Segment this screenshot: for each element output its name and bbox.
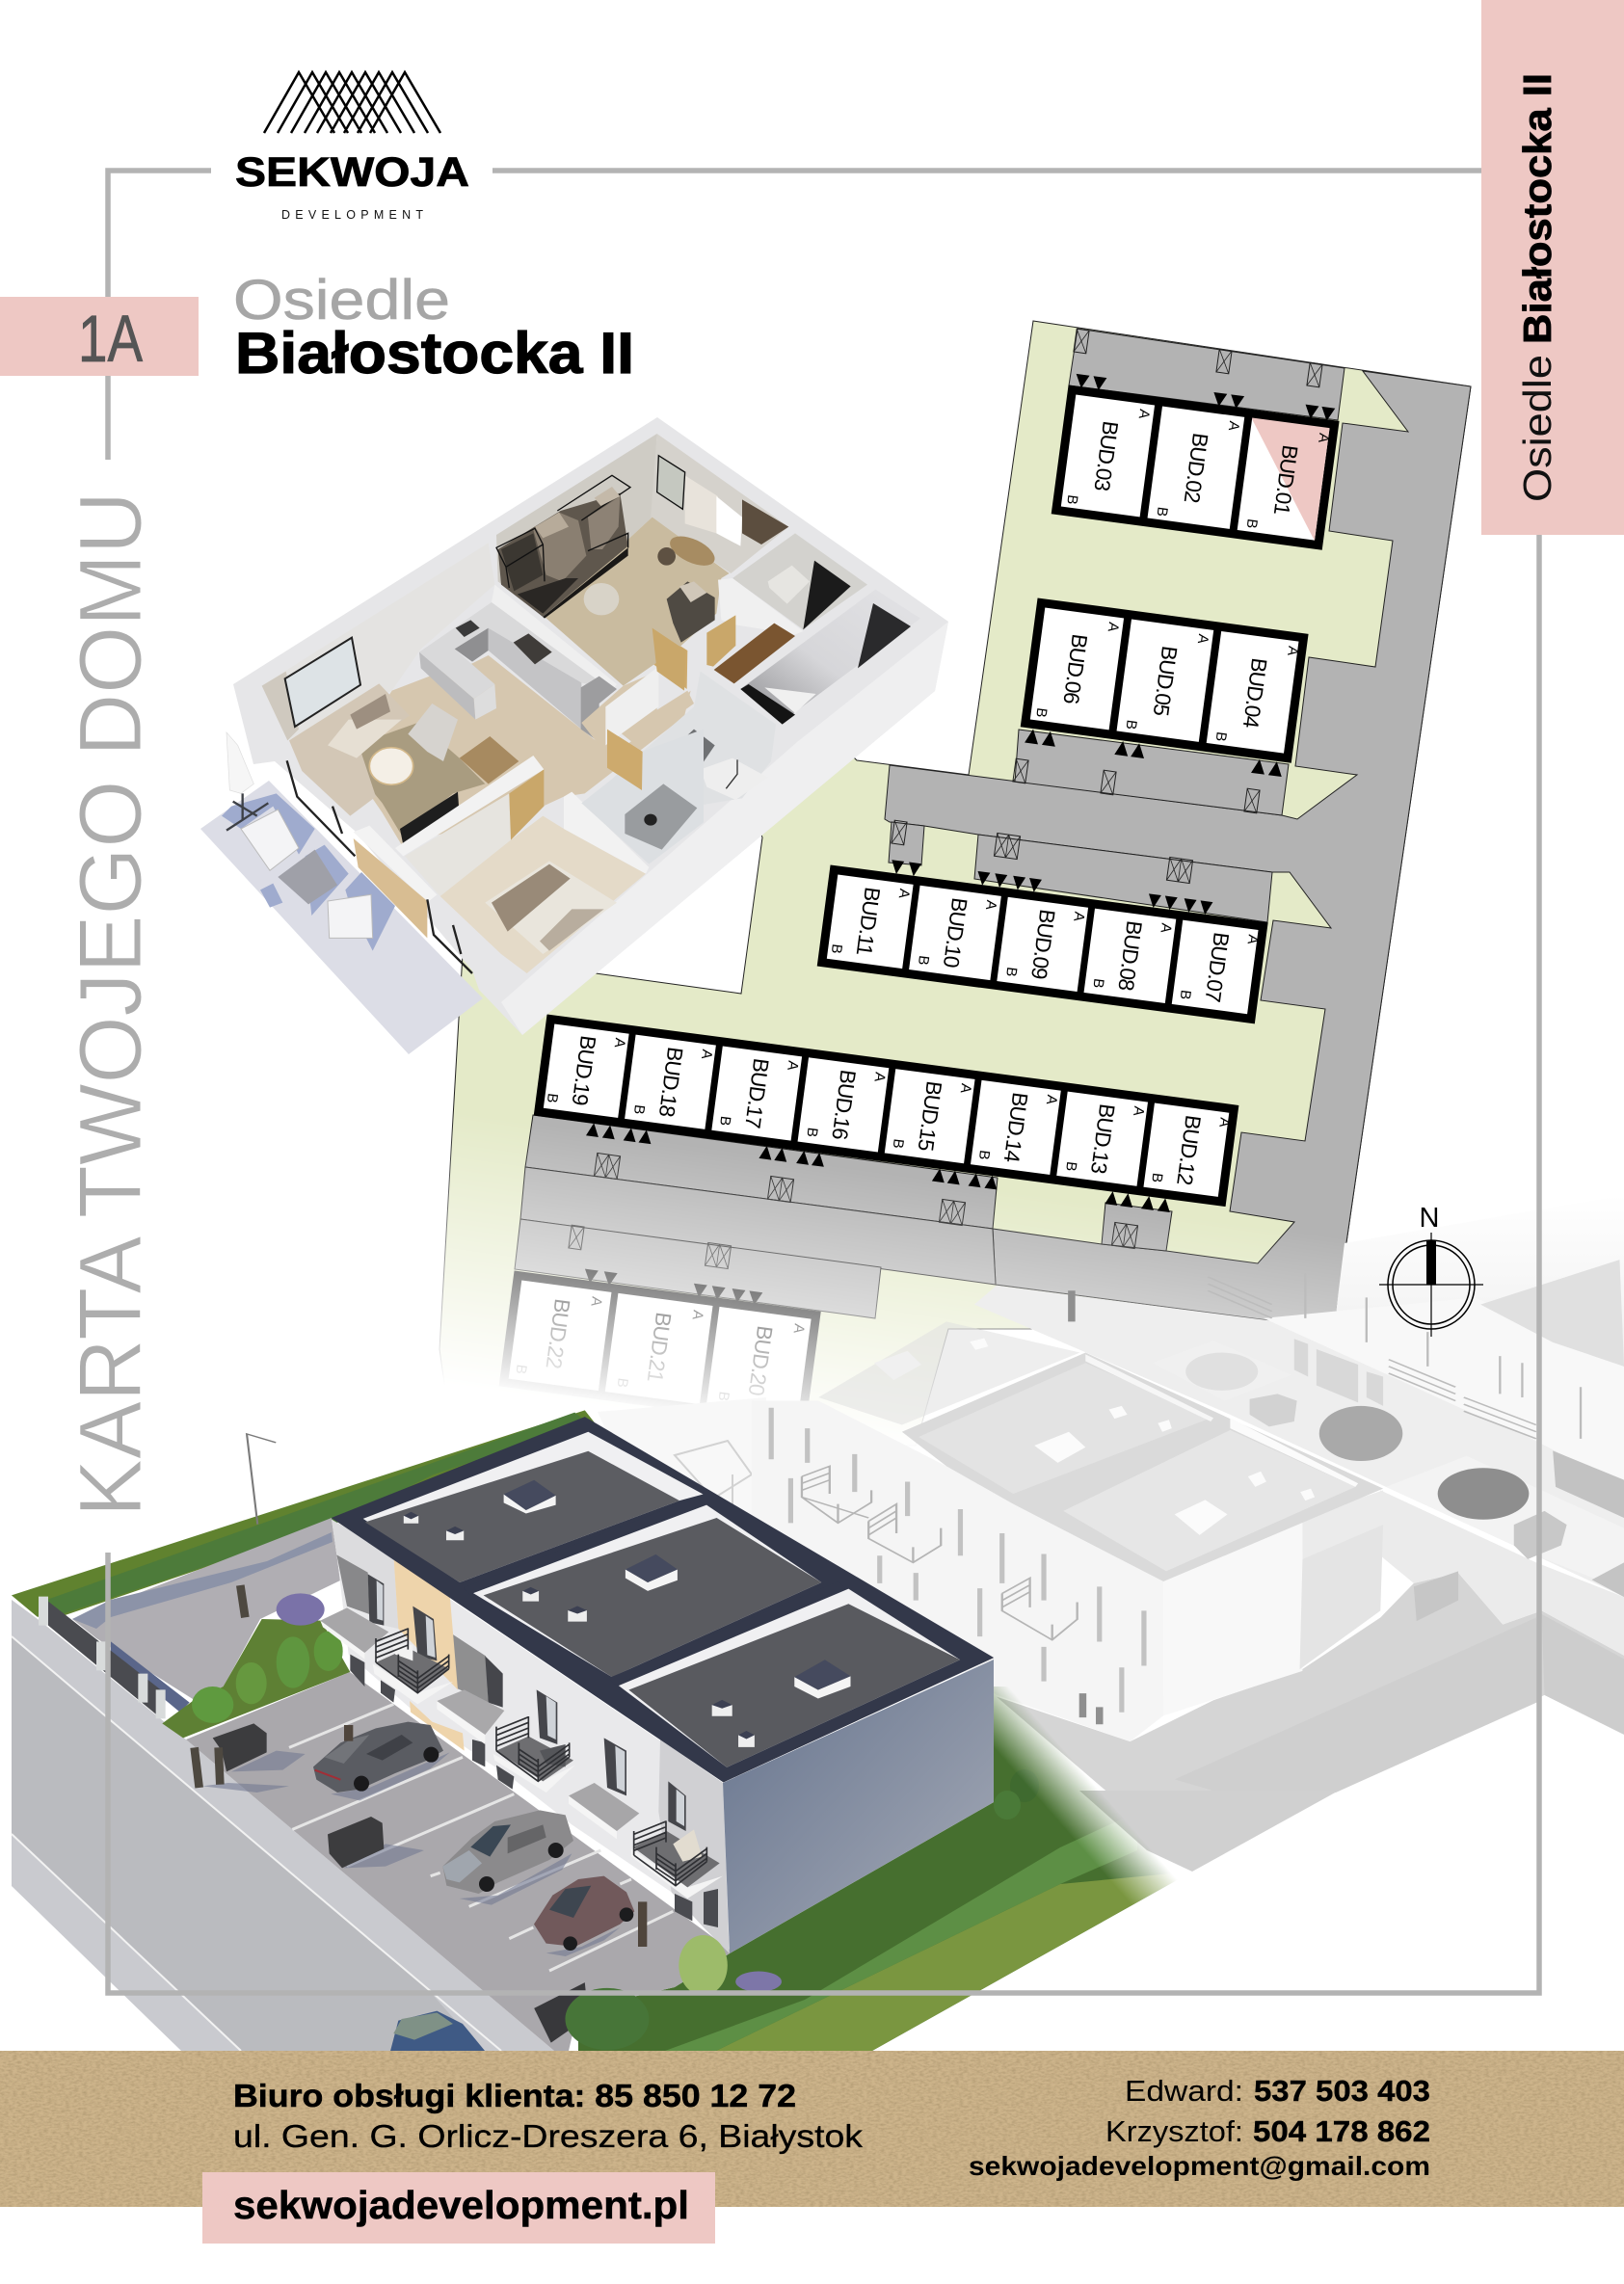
render: windows — [368, 1574, 686, 1831]
aerial render of the building — [12, 1410, 1253, 2051]
plan: faded row BUD.20-22: B — [513, 1364, 530, 1375]
plan: row BUD.07-11: A — [1244, 934, 1262, 945]
ghost: facade balconies — [802, 1466, 1078, 1640]
contact: phones and email: Krzysztof: — [1105, 2114, 1243, 2148]
ghost: cars and bins — [1185, 1353, 1258, 1391]
apartment: sofa — [289, 683, 410, 816]
plan: faded row BUD.20-22 — [499, 1268, 821, 1406]
plan: green site area — [439, 321, 1471, 1446]
frame lines — [108, 171, 1539, 1993]
apartment: dressing room walls — [496, 434, 657, 617]
plan: row BUD.12-19: B — [975, 1149, 993, 1160]
render: parking lines — [289, 1704, 673, 1971]
contact: office — [233, 2078, 864, 2154]
render: facade — [332, 1520, 730, 1953]
apartment: terrace furniture — [241, 810, 299, 870]
plan: row BUD.12-19: BUD.17 — [740, 1057, 773, 1129]
apartment: hall floor — [581, 672, 694, 745]
ghost: far row facade — [1264, 1297, 1624, 1487]
plan: row BUD.01-03: BUD.03 — [1089, 419, 1123, 492]
ghost: left facade extension — [598, 1397, 766, 1658]
plan: faded row BUD.20-22: BUD.22 — [542, 1297, 574, 1370]
ghost: faint area around the compass — [1334, 1195, 1624, 1397]
apartment: wardrobe racks — [498, 493, 628, 617]
render: grass verge — [12, 1410, 595, 1619]
apartment: wooden doors — [652, 628, 686, 691]
plan: row BUD.12-19: A — [1215, 1117, 1234, 1129]
apartment: wood floor — [347, 655, 691, 845]
apartment: desk and stool — [666, 530, 719, 571]
plan: row BUD.01-03: BUD.01 — [1269, 443, 1302, 517]
plan: row BUD.07-11: B — [828, 943, 845, 955]
plan: row BUD.12-19: BUD.14 — [999, 1091, 1032, 1163]
render: roof — [247, 1417, 994, 2050]
plan: row BUD.04-06 — [1023, 602, 1304, 778]
apartment: picture — [285, 638, 360, 727]
render: skylights — [504, 1480, 850, 1698]
apartment: living wall — [262, 543, 494, 740]
plan: row BUD.12-19: A — [784, 1060, 801, 1072]
render: courtyard paving — [72, 1518, 340, 1699]
ghost: gable wall — [1163, 1518, 1302, 1715]
ghost: facade windows — [771, 1408, 1144, 1713]
contact: phones and email: 537 503 403 — [1254, 2074, 1430, 2108]
apartment: dining table — [460, 736, 519, 783]
plan: row BUD.07-11: B — [915, 954, 932, 966]
apartment: staircase room — [740, 590, 920, 723]
plan: faded row BUD.20-22: B — [614, 1377, 631, 1389]
ghost: lower ground — [997, 1573, 1624, 1793]
apartment: coffee table — [369, 748, 413, 784]
apartment: tv unit — [400, 792, 459, 845]
vertical title: KARTA TWOJEGO DOMU — [62, 491, 160, 1517]
heading: Białostocka II — [235, 321, 634, 385]
plan: row BUD.04-06: B — [1122, 719, 1140, 730]
plan: row BUD.04-06: B — [1212, 730, 1230, 742]
plan: row BUD.12-19: B — [716, 1115, 733, 1127]
website box — [202, 2172, 715, 2244]
render: people at cars — [349, 1725, 643, 1947]
render: lawn fading to grey — [578, 1686, 1176, 2051]
render: balcony canopies — [320, 1621, 364, 1660]
plan: utility boxes — [569, 329, 1322, 1269]
apartment: outer shell — [233, 417, 948, 1035]
render: balcony railings — [376, 1628, 720, 1887]
plan: row BUD.01-03: BUD.02 — [1180, 432, 1212, 504]
plan: row BUD.04-06: BUD.05 — [1149, 645, 1182, 717]
render: side wall — [723, 1660, 994, 1953]
plan: row BUD.01-03 — [1056, 374, 1337, 545]
ghost: road and parking — [1386, 1456, 1624, 1590]
plan: row BUD.07-11: BUD.07 — [1201, 931, 1234, 1003]
ghost: skylights — [874, 1339, 1315, 1535]
plan: faded row BUD.20-22: BUD.21 — [643, 1311, 676, 1384]
plan: row BUD.12-19: A — [1043, 1094, 1060, 1105]
ghost: light ground and driveway — [974, 1286, 1624, 1597]
plan: row BUD.12-19: B — [890, 1138, 907, 1150]
ghost: lower ground continuation — [1079, 1791, 1339, 1872]
apartment: window frames — [287, 760, 472, 973]
compass — [1379, 1203, 1483, 1337]
logo: tagline: DEVELOPMENT — [281, 208, 423, 222]
apartment: bedroom-bathroom wall — [564, 792, 649, 874]
plan: row BUD.07-11: B — [1002, 966, 1020, 977]
plan: row BUD.12-19: A — [698, 1049, 715, 1060]
plan: faded row BUD.20-22: A — [790, 1322, 808, 1335]
plan: row BUD.12-19: BUD.16 — [827, 1069, 861, 1141]
plan: row BUD.12-19: BUD.12 — [1172, 1114, 1206, 1186]
apartment: armchair — [408, 704, 458, 761]
site plan — [439, 321, 1471, 1446]
plan: row BUD.04-06: BUD.06 — [1058, 632, 1092, 705]
ghost: faint roof over plan — [818, 1321, 1080, 1425]
plan: row BUD.07-11: B — [1089, 977, 1106, 989]
plan: row BUD.12-19: BUD.13 — [1086, 1102, 1119, 1175]
apartment: terrace — [200, 781, 483, 1054]
plan: row BUD.12-19: A — [611, 1037, 628, 1049]
apartment: corridor wall and stair landing — [718, 578, 803, 634]
plan: row BUD.04-06: BUD.04 — [1238, 656, 1271, 730]
apartment: dressing room floor — [545, 518, 730, 686]
tab: estate name — [1481, 0, 1624, 535]
apartment: wood-clad wall — [354, 826, 437, 903]
compass: N — [1420, 1203, 1439, 1234]
render: balcony slabs — [373, 1664, 453, 1704]
render: lamp post — [247, 1434, 276, 1525]
apartment: inner wall — [605, 667, 658, 745]
apartment: closet — [732, 533, 867, 629]
render: shadows on paving — [331, 1752, 620, 1956]
plan: row BUD.12-19: B — [803, 1127, 821, 1138]
plan: row BUD.07-11: A — [1157, 922, 1175, 934]
apartment: bedroom wall — [405, 793, 511, 896]
render: people and courtyard mailbox — [195, 1585, 306, 1793]
apartment 3D floor plan — [200, 417, 948, 1054]
render: passing car — [390, 2011, 485, 2051]
plan: row BUD.01-03: A — [1225, 420, 1242, 432]
apartment: bed — [485, 861, 617, 954]
faded neighbouring buildings — [752, 1260, 1624, 1793]
plan: faded row BUD.20-22: A — [689, 1309, 706, 1321]
ghost: roof — [902, 1353, 1383, 1581]
plan: row BUD.12-19: A — [957, 1082, 974, 1094]
render: ochre cladding — [393, 1554, 458, 1689]
render: doors — [350, 1655, 718, 1927]
plan: row BUD.12-19: B — [1062, 1160, 1079, 1172]
plan: faded row BUD.20-22: BUD.20 — [744, 1324, 777, 1397]
plan: row BUD.07-11: A — [895, 888, 913, 899]
render: car silver — [442, 1810, 573, 1894]
plan: row BUD.07-11: BUD.11 — [852, 886, 885, 957]
plan: row BUD.01-03: B — [1243, 518, 1261, 529]
plan: row BUD.01-03: B — [1063, 493, 1080, 506]
tab: estate name: Białostocka II — [1515, 73, 1559, 344]
ghost: far row windows and balconies — [1208, 1273, 1581, 1439]
render: fence and garden — [43, 1593, 350, 1738]
ghost: main front facade — [752, 1401, 1163, 1741]
plan: row BUD.07-11: A — [982, 899, 999, 911]
apartment: kitchen counter — [492, 585, 617, 691]
plan: row BUD.12-19: A — [1130, 1105, 1147, 1117]
plan: row BUD.12-19: B — [544, 1092, 561, 1103]
apartment: left rooms — [222, 543, 691, 973]
heading: Osiedle — [233, 269, 450, 332]
apartment: terrace shadows — [222, 793, 395, 951]
render: roof vents — [404, 1516, 755, 1747]
plan: row BUD.12-19: B — [630, 1103, 648, 1115]
plan: row BUD.07-11: BUD.10 — [939, 896, 972, 969]
contact: phones and email: 504 178 862 — [1253, 2114, 1430, 2148]
plan: roads and driveways — [515, 329, 1471, 1329]
render: front mailbox, bush and tree — [534, 1982, 588, 2043]
contact: phones and email: Edward: — [1125, 2074, 1243, 2108]
label: 1A: 1A — [78, 302, 143, 376]
apartment: wooden doors — [509, 769, 544, 840]
apartment: bedroom floor — [440, 816, 646, 973]
plan: row BUD.01-03: A — [1135, 408, 1153, 420]
apartment: rug — [347, 723, 485, 836]
footer band — [0, 2051, 1624, 2207]
plan: row BUD.01-03: A — [1315, 432, 1332, 443]
plan: row BUD.07-11 — [822, 853, 1265, 1019]
heading — [233, 269, 634, 385]
plan: row BUD.04-06: A — [1105, 621, 1122, 633]
plan: row BUD.04-06: B — [1032, 706, 1050, 719]
contact: phones and email — [969, 2074, 1430, 2181]
plan: row BUD.07-11: A — [1070, 911, 1087, 922]
logo: wordmark: SEKWOJA — [235, 149, 469, 196]
apartment: pouf — [584, 583, 619, 615]
plan: row BUD.04-06: A — [1194, 633, 1211, 645]
render: road and sidewalk — [12, 1600, 554, 2051]
plan: row BUD.07-11: BUD.09 — [1026, 908, 1059, 980]
apartment: bathroom — [643, 672, 776, 807]
render: car mauve — [534, 1876, 634, 1947]
plan: row BUD.04-06: A — [1284, 645, 1301, 656]
render: building front and parking — [289, 1520, 730, 1971]
logo: roof mark — [264, 72, 440, 133]
plan: faded row BUD.20-22: A — [587, 1295, 605, 1308]
plan: row BUD.12-19: B — [1148, 1172, 1165, 1183]
tab: estate name: Osiedle — [1515, 355, 1559, 502]
plan: row BUD.12-19: BUD.19 — [568, 1034, 600, 1106]
apartment: bathroom lower part — [581, 730, 704, 864]
plan: row BUD.12-19 — [536, 1019, 1235, 1219]
ghost: people — [1072, 1290, 1100, 1724]
plan: row BUD.12-19: BUD.15 — [914, 1079, 946, 1153]
apartment: right rooms — [496, 434, 920, 807]
logo — [235, 72, 469, 222]
plan: faded row BUD.20-22: B — [715, 1391, 732, 1402]
website box: sekwojadevelopment.pl — [233, 2183, 689, 2227]
plan: row BUD.07-11: BUD.08 — [1113, 919, 1147, 992]
plan: row BUD.12-19: BUD.18 — [654, 1046, 687, 1118]
render: roof dividers — [466, 1501, 841, 1682]
plan: row BUD.07-11: B — [1177, 989, 1194, 1000]
label: 1A — [0, 297, 199, 376]
render: parking pavement — [186, 1672, 732, 2051]
render: mailbox — [328, 1817, 384, 1868]
render: car graphite — [313, 1722, 443, 1793]
contact: office: Biuro obsługi klienta: 85 850 12 72 — [233, 2078, 796, 2113]
plan: row BUD.01-03: B — [1153, 506, 1171, 518]
contact: office: ul. Gen. G. Orlicz-Dreszera 6, Białystok — [233, 2118, 864, 2154]
apartment: window and curtain — [685, 475, 718, 533]
plan: row BUD.12-19: A — [870, 1071, 889, 1083]
contact: phones and email: sekwojadevelopment@gmail.com — [969, 2151, 1430, 2181]
